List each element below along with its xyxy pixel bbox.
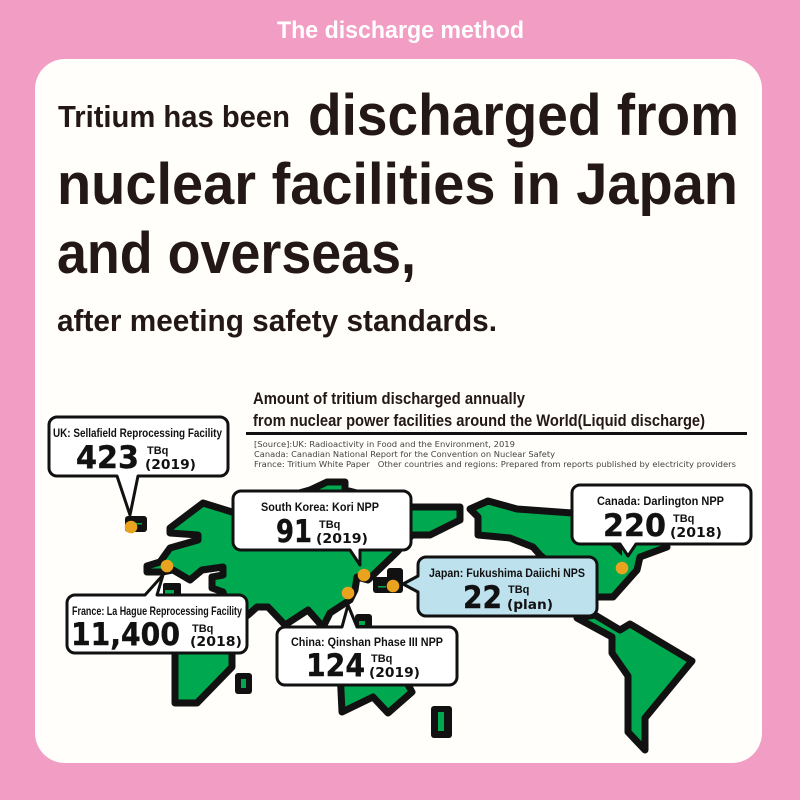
callout: France: (2018) [190, 635, 242, 650]
map: Southeast Asia [340, 670, 412, 713]
map: Madagascar [235, 673, 252, 694]
callout: UK: 423 [76, 440, 139, 476]
callout: UK: UK: Sellafield Reprocessing Facility [53, 428, 223, 440]
header title: The discharge method [277, 17, 524, 44]
map: Mediterranean island [163, 583, 181, 598]
callout: South Korea: 91 [276, 514, 312, 550]
callout: China: 124 [306, 648, 365, 684]
callout: South Korea: TBq [319, 519, 340, 531]
callout: Canada: Canada: Darlington NPP [597, 496, 724, 508]
headline: after meeting safety standards. [57, 303, 497, 338]
callout: South Korea: South Korea: Kori NPP [261, 502, 379, 514]
location dot: France La Hague [161, 560, 173, 572]
callout: Canada: 220 [603, 508, 666, 544]
callout: UK [49, 417, 228, 515]
callout: Japan: 22 [463, 580, 502, 616]
map: Japan islands [373, 568, 403, 593]
chart title: from nuclear power facilities around the World(Liquid discharge) [253, 411, 705, 430]
map: Hudson Bay notch [608, 543, 622, 556]
headline: and overseas, [57, 221, 416, 286]
location dot: UK Sellafield [125, 521, 137, 533]
headline [57, 83, 739, 338]
callout: Japan: (plan) [507, 598, 553, 613]
main white panel [35, 59, 762, 763]
callout: France: France: La Hague Reprocessing Facility [72, 606, 242, 618]
callout: China: China: Qinshan Phase III NPP [291, 637, 443, 649]
callout: Japan [403, 557, 597, 616]
source notes: [Source]:UK: Radioactivity in Food and the Environment, 2019 [254, 440, 515, 449]
callout: Canada: (2018) [670, 526, 722, 541]
map: UK island [125, 516, 147, 532]
map: Australia-side small island [431, 706, 452, 738]
world map [125, 482, 692, 750]
map: Africa [175, 640, 232, 703]
map: Taiwan-like island [355, 614, 372, 629]
map: North America [470, 501, 667, 597]
callout: France: TBq [192, 623, 213, 635]
headline: nuclear facilities in Japan [57, 152, 738, 217]
location dot: South Korea Kori [358, 569, 370, 581]
callout: China: TBq [371, 653, 392, 665]
callout: UK: (2019) [145, 458, 196, 473]
map: South America [577, 615, 692, 750]
source notes: France: Tritium White Paper Other countries and regions: Prepared from reports published by electricity providers [254, 460, 736, 469]
callout: South Korea [233, 491, 411, 565]
location dot: China Qinshan [342, 587, 354, 599]
callout: Canada [572, 485, 751, 556]
location dot: Canada Darlington [616, 562, 628, 574]
chart title: Amount of tritium discharged annually [253, 389, 525, 408]
headline: Tritium has been [58, 99, 290, 134]
callout: Japan: TBq [508, 584, 529, 596]
callout: China [277, 605, 457, 685]
callout: China: (2019) [369, 666, 420, 681]
location dot: Japan Fukushima [387, 580, 399, 592]
source notes: Canada: Canadian National Report for the Convention on Nuclear Safety [254, 450, 555, 459]
headline: discharged from [308, 83, 739, 148]
callout: UK: TBq [147, 445, 168, 457]
callout: France [67, 575, 247, 653]
callout: France: 11,400 [71, 617, 180, 653]
callout: South Korea: (2019) [316, 532, 368, 547]
source notes [254, 440, 736, 469]
callout: Japan: Japan: Fukushima Daiichi NPS [429, 568, 585, 580]
map: Eurasia [147, 482, 460, 627]
callout: Canada: TBq [673, 513, 694, 525]
chart title [246, 389, 747, 435]
